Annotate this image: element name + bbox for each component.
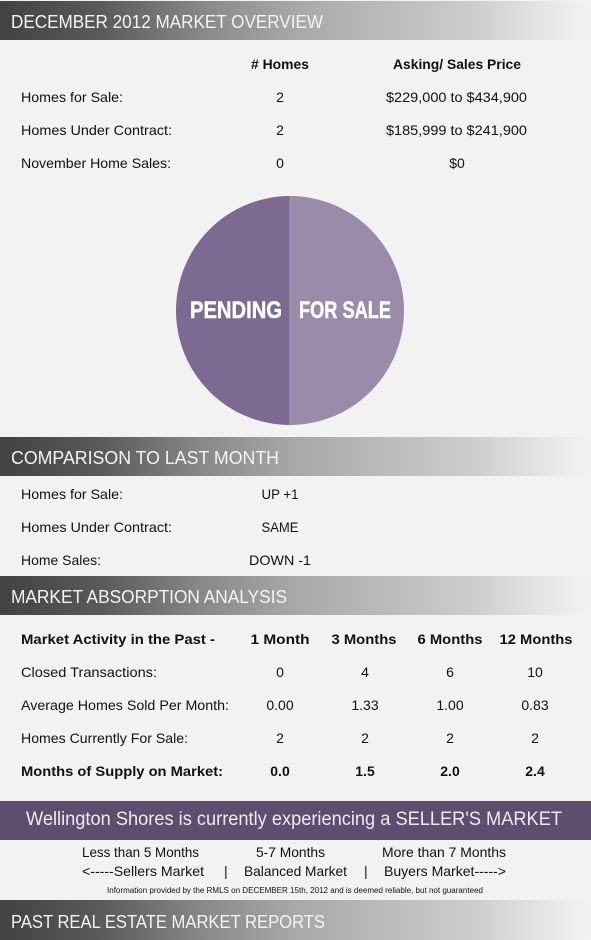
header: comparison to last month xyxy=(0,437,591,476)
table: market absorption: 0.0 xyxy=(270,763,290,779)
table: market absorption: 2 xyxy=(361,730,369,746)
legend: market scale: Balanced Market xyxy=(244,863,347,879)
table: market overview: Asking/ Sales Price xyxy=(393,56,521,72)
legend: market scale: <-----Sellers Market xyxy=(82,863,204,879)
table: market overview: Homes Under Contract: xyxy=(21,122,172,138)
table: comparison xyxy=(21,486,311,568)
table: market absorption: 1.33 xyxy=(351,697,379,713)
table: comparison: Homes Under Contract: xyxy=(21,519,172,535)
table: market overview: Homes for Sale: xyxy=(21,89,123,105)
header: market absorption analysis xyxy=(0,576,591,615)
table: market absorption: 0.83 xyxy=(521,697,549,713)
header: comparison to last month: COMPARISON TO LAST MONTH xyxy=(11,448,279,468)
header: past real estate market reports: PAST REAL ESTATE MARKET REPORTS xyxy=(11,912,325,932)
table: market absorption: Market Activity in the Past - xyxy=(21,631,215,647)
banner: seller's market xyxy=(0,801,591,840)
table: market absorption: 2.0 xyxy=(440,763,460,779)
table: market overview: $0 xyxy=(449,155,465,171)
pie chart: pending vs for sale: PENDING xyxy=(190,297,282,324)
table: market absorption: 1 Month xyxy=(250,631,310,647)
header: market absorption analysis: MARKET ABSORPTION ANALYSIS xyxy=(11,587,287,607)
table: market absorption: 1.5 xyxy=(355,763,375,779)
table: comparison: DOWN -1 xyxy=(249,552,311,568)
pie chart: pending vs for sale: FOR SALE xyxy=(299,297,391,324)
table: comparison: SAME xyxy=(262,519,298,535)
table: market absorption: 6 xyxy=(446,664,454,680)
legend: market scale: | xyxy=(224,863,228,879)
table: market absorption: 2.4 xyxy=(525,763,545,779)
legend: market scale: More than 7 Months xyxy=(382,844,506,860)
table: market absorption: 3 Months xyxy=(332,631,397,647)
table: market absorption xyxy=(21,631,573,779)
table: market absorption: Homes Currently For Sale: xyxy=(21,730,188,746)
table: market overview xyxy=(21,56,527,171)
table: market overview: 2 xyxy=(276,122,284,138)
table: market absorption: 10 xyxy=(527,664,543,680)
table: market absorption: 1.00 xyxy=(436,697,464,713)
legend: market scale: | xyxy=(364,863,368,879)
table: market absorption: 6 Months xyxy=(418,631,483,647)
legend: market scale: Buyers Market-----> xyxy=(384,863,506,879)
header: December 2012 market overview: DECEMBER 2012 MARKET OVERVIEW xyxy=(11,12,323,32)
legend: market scale: 5-7 Months xyxy=(256,844,325,860)
header: past real estate market reports xyxy=(0,900,591,940)
table: market absorption: Average Homes Sold Per Month: xyxy=(21,697,229,713)
table: comparison: Home Sales: xyxy=(21,552,101,568)
table: market overview: 0 xyxy=(276,155,284,171)
footnote: data source: Information provided by the RMLS on DECEMBER 15th, 2012 and is deemed reliable, but not guaranteed xyxy=(107,886,483,895)
table: market absorption: 4 xyxy=(361,664,369,680)
header: December 2012 market overview xyxy=(0,1,591,40)
pie chart: pending vs for sale xyxy=(176,196,404,425)
table: market overview: $229,000 to $434,900 xyxy=(386,89,527,105)
banner: seller's market: Wellington Shores is currently experiencing a SELLER'S MARKET xyxy=(26,809,562,830)
table: market absorption: Closed Transactions: xyxy=(21,664,157,680)
table: market absorption: 0 xyxy=(276,664,284,680)
table: market overview: # Homes xyxy=(251,56,309,72)
table: market overview: 2 xyxy=(276,89,284,105)
legend: market scale xyxy=(82,844,506,879)
table: market absorption: 2 xyxy=(446,730,454,746)
table: market absorption: 2 xyxy=(276,730,284,746)
table: market absorption: 0.00 xyxy=(266,697,294,713)
table: comparison: Homes for Sale: xyxy=(21,486,123,502)
table: market absorption: 2 xyxy=(531,730,539,746)
table: market absorption: 12 Months xyxy=(500,631,573,647)
table: comparison: UP +1 xyxy=(262,486,299,502)
legend: market scale: Less than 5 Months xyxy=(82,844,199,860)
table: market overview: $185,999 to $241,900 xyxy=(386,122,527,138)
table: market absorption: Months of Supply on Market: xyxy=(21,763,223,779)
table: market overview: November Home Sales: xyxy=(21,155,171,171)
